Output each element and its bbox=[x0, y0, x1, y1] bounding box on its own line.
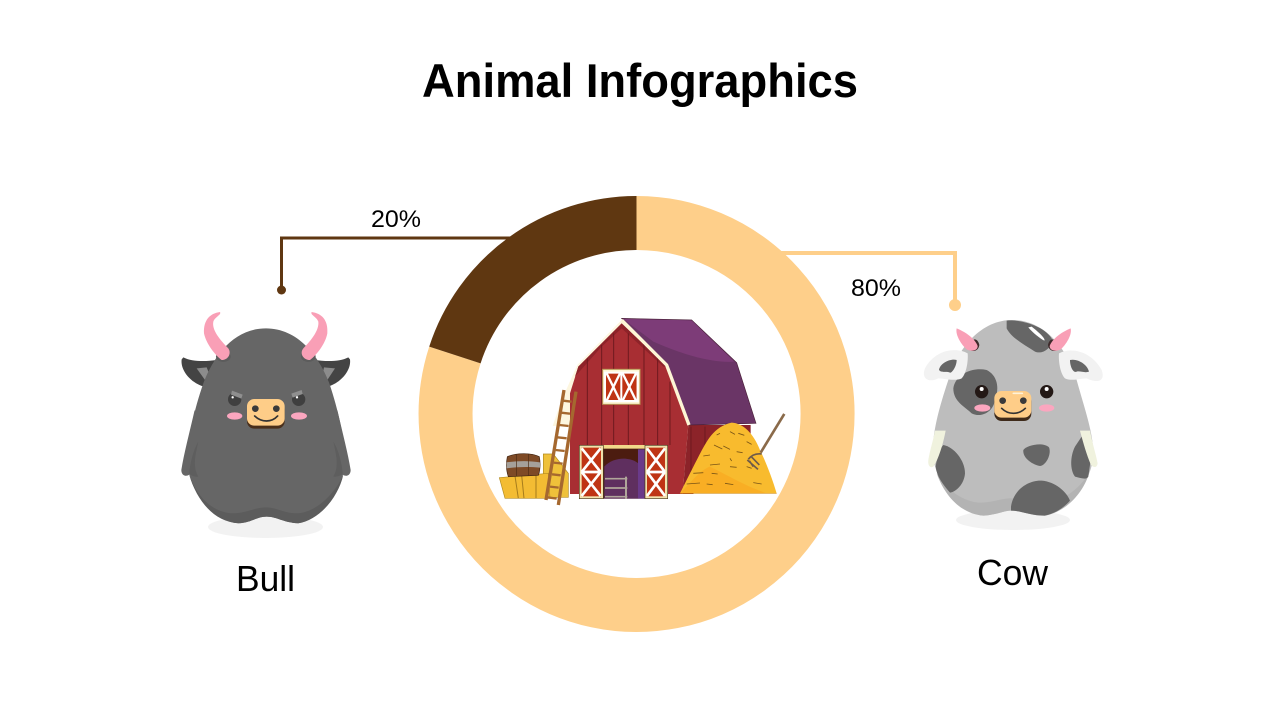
barn door left bbox=[579, 445, 603, 499]
ladder bbox=[546, 390, 576, 505]
barn side wall bbox=[683, 425, 751, 494]
barn door right bbox=[645, 445, 668, 499]
cow ear right bbox=[1059, 351, 1103, 381]
connector: bull 20% bbox=[277, 238, 512, 294]
bull snout bbox=[247, 399, 285, 429]
cow horn right bbox=[1048, 328, 1071, 351]
cow spots bbox=[936, 320, 1092, 516]
cow eye right bbox=[1040, 385, 1053, 398]
icon: barn bbox=[499, 318, 784, 505]
label: 20%: 20% bbox=[371, 206, 421, 233]
shadow: bull bbox=[208, 516, 323, 538]
cow body bbox=[933, 320, 1093, 516]
label: 80%: 80% bbox=[851, 275, 901, 302]
pitchfork bbox=[747, 414, 784, 469]
bull eye right bbox=[291, 390, 305, 406]
barn doorway bbox=[603, 445, 645, 499]
shadow: cow bbox=[956, 510, 1070, 530]
barrel bbox=[506, 454, 540, 477]
label: Cow: Cow bbox=[977, 552, 1049, 593]
hay pile bbox=[680, 423, 777, 493]
cow eye left bbox=[975, 385, 988, 398]
bull body bbox=[187, 328, 345, 523]
bull cheeks bbox=[227, 412, 307, 420]
cow horn left bbox=[956, 328, 979, 351]
bull eye left bbox=[228, 391, 243, 406]
icon: cow bbox=[924, 320, 1103, 516]
barn front wall bbox=[570, 323, 688, 494]
bull horn left bbox=[204, 312, 231, 362]
bull arm right bbox=[330, 410, 351, 476]
barn window bbox=[603, 369, 640, 404]
donut chart bbox=[446, 223, 828, 605]
title: Animal Infographics bbox=[422, 54, 858, 107]
bull arm left bbox=[181, 410, 202, 476]
cow cheeks bbox=[974, 404, 1054, 412]
bull horn right bbox=[301, 312, 327, 362]
cow snout bbox=[994, 391, 1031, 421]
cow arm left bbox=[928, 431, 946, 467]
segment: bull 20% bbox=[455, 223, 636, 355]
label: Bull: Bull bbox=[236, 558, 295, 599]
cow ear left bbox=[924, 350, 968, 380]
segment: cow 80% bbox=[446, 223, 828, 605]
hay bales bbox=[499, 454, 568, 498]
bull ear left bbox=[182, 357, 217, 387]
connector: cow 80% bbox=[780, 253, 961, 311]
barn roof bbox=[622, 318, 756, 425]
bull ear right bbox=[315, 357, 350, 387]
icon: bull bbox=[181, 312, 351, 523]
cow arm right bbox=[1080, 431, 1098, 467]
